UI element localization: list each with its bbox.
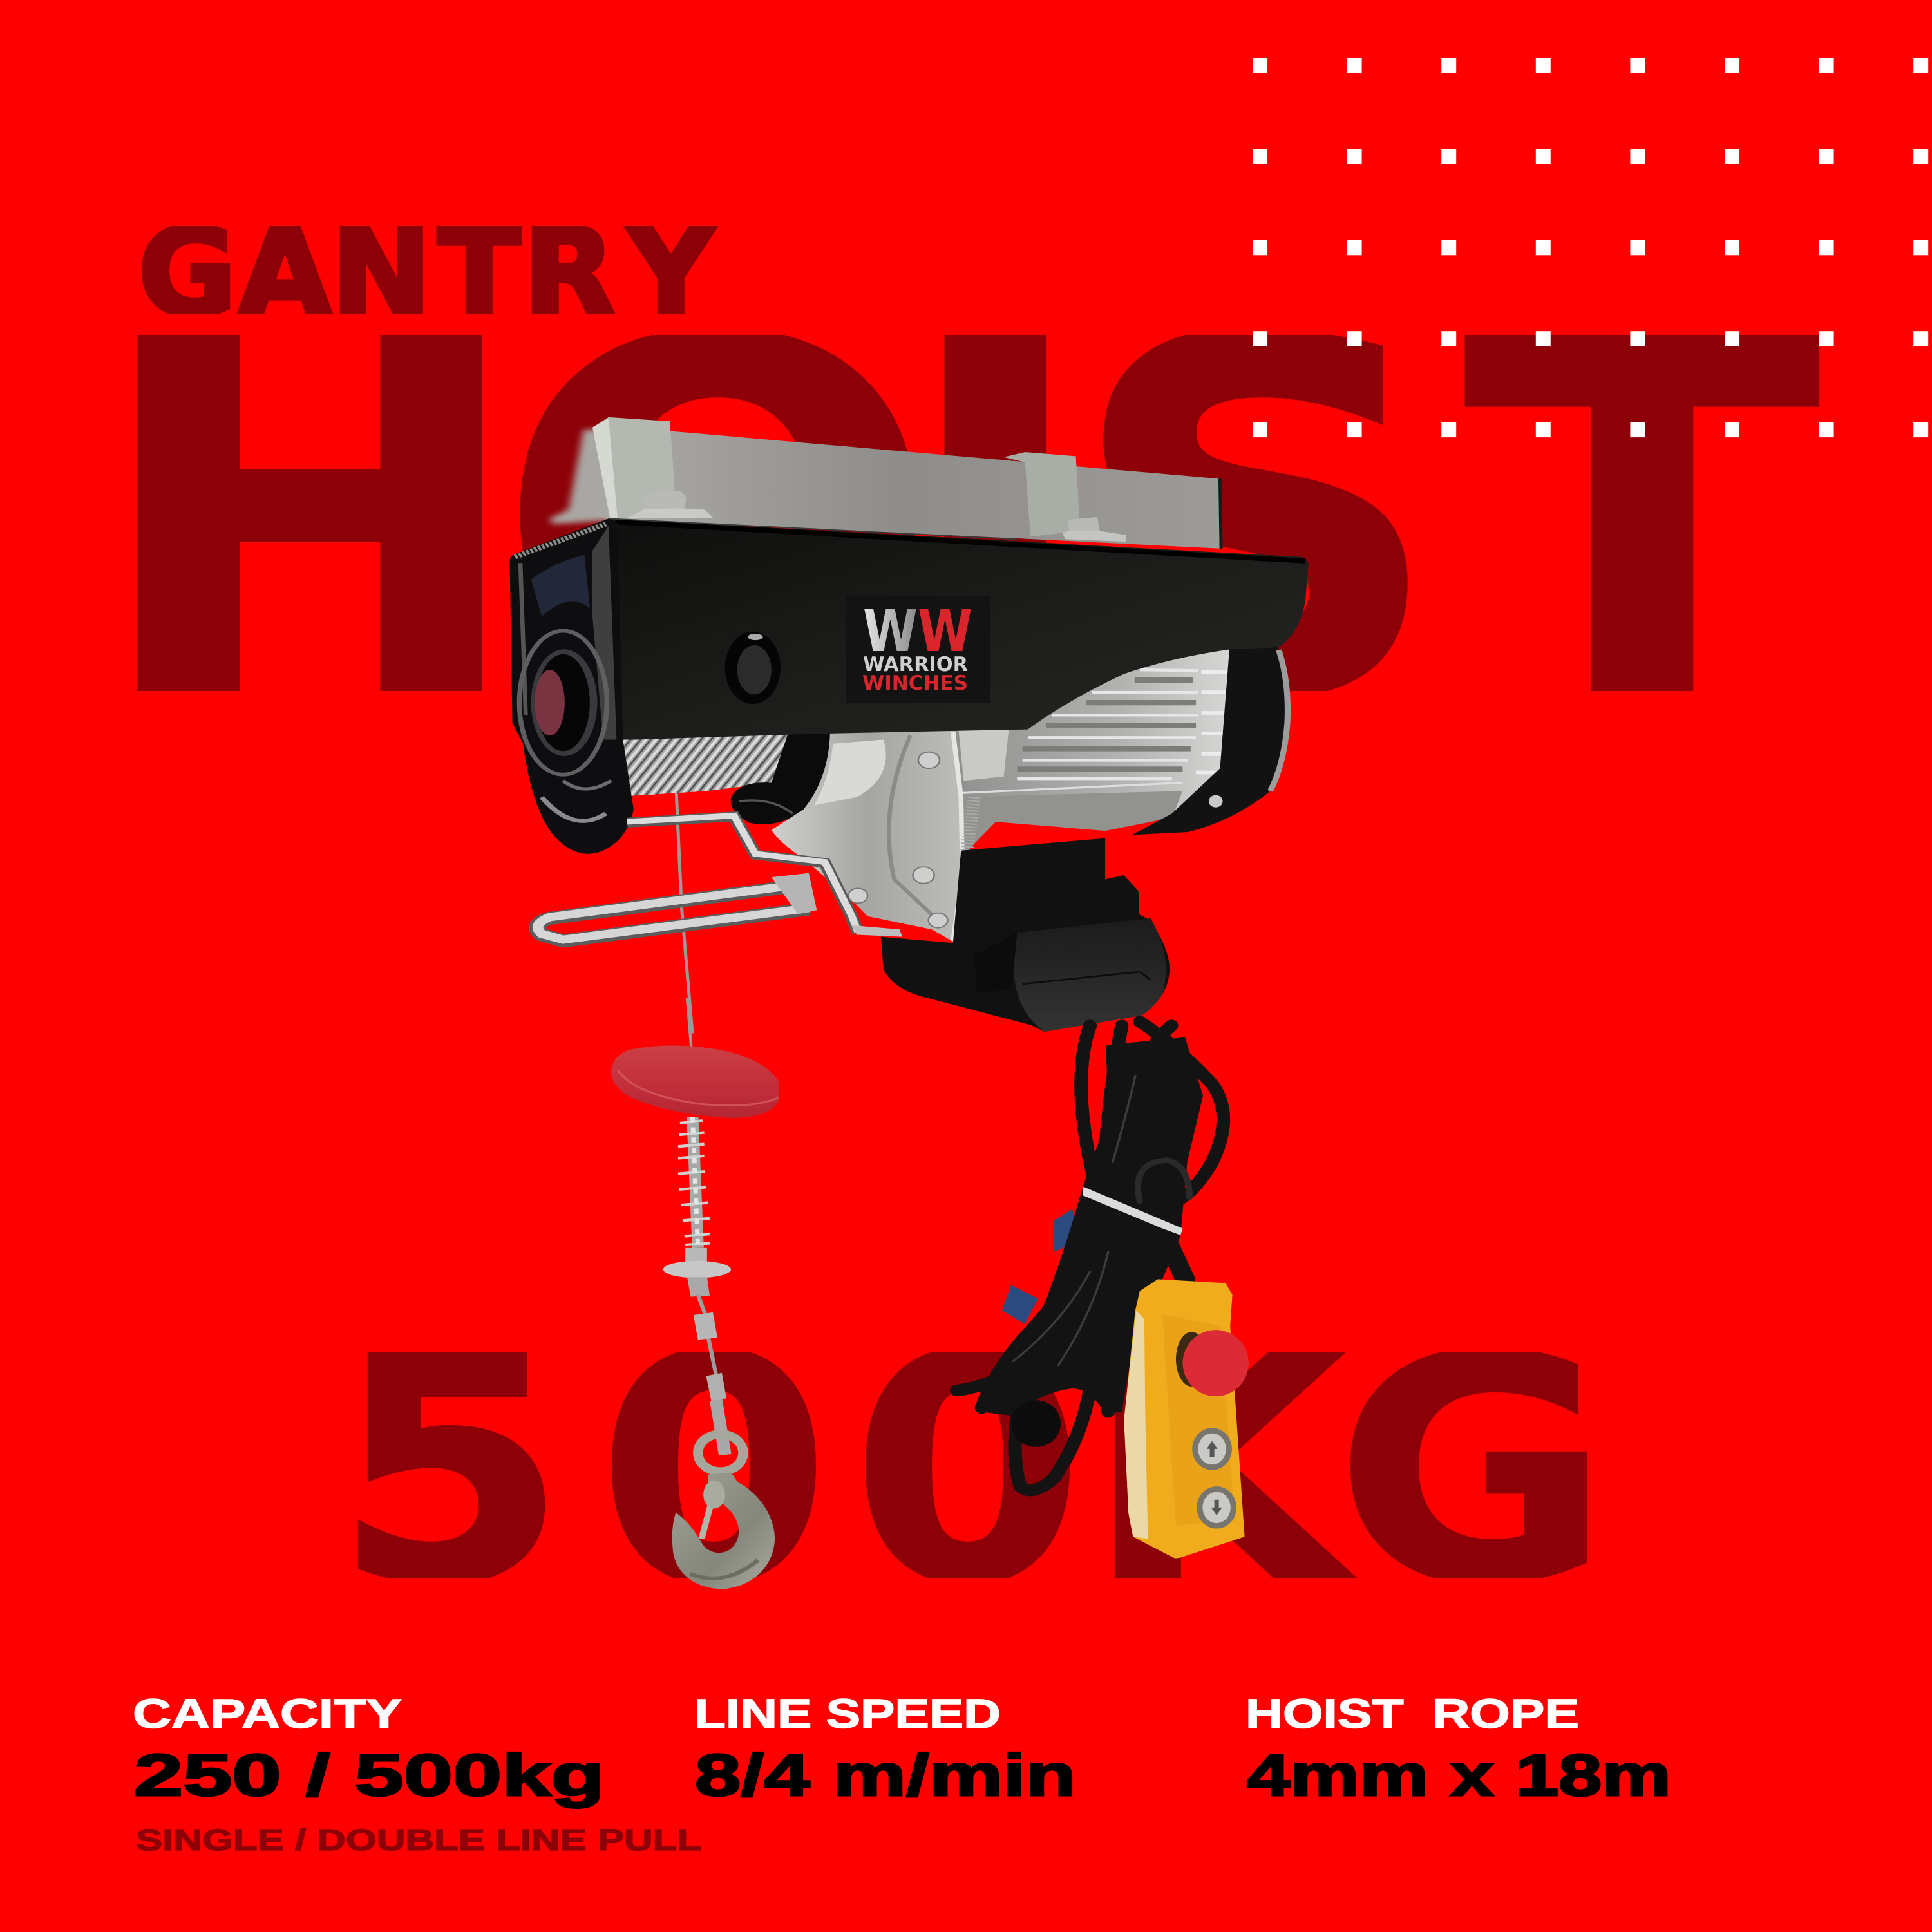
emergency stop button [1176,1330,1249,1396]
logo word WARRIOR: WARRIOR [863,653,968,676]
washer and collar [663,1248,731,1297]
product: rope, stopper and hook [611,998,779,1589]
hook [672,1472,775,1589]
capacity note: SINGLE / DOUBLE LINE PULL [136,1823,701,1857]
hoist rope label: HOIST ROPE [1245,1690,1579,1737]
control housing [881,838,1170,1032]
heading: GANTRY: GANTRY [138,203,716,343]
cable mass [981,1037,1203,1416]
motor end cap [1132,633,1288,835]
red stopper disc [611,1046,779,1118]
cable bundle [957,1021,1224,1490]
second flange [731,727,840,824]
gearbox [772,727,1009,943]
logo word WINCHES: WINCHES [862,672,968,695]
product: cable bundle and pendant [957,1021,1249,1559]
spec: capacity [133,1690,701,1857]
housing hole [725,632,781,704]
spring [678,1117,710,1248]
logo mark WW: WW [863,598,972,665]
line speed label: LINE SPEED [694,1690,1001,1737]
plug [1011,1400,1061,1447]
bracket left [592,417,713,520]
U handle [537,873,902,941]
mounting box [550,430,1221,549]
product: electric hoist upper body [509,417,1309,1034]
spec: line speed [694,1690,1076,1808]
wire rope [676,793,692,1034]
up button [1192,1428,1232,1470]
rope segment [687,998,691,1047]
capacity value: 250 / 500kg [134,1743,605,1808]
pendant controller [1124,1279,1249,1559]
heading: 500KG: 500KG [334,1291,1610,1652]
logo: Warrior Winches [846,596,990,703]
heading: HOIST: HOIST [91,238,1823,806]
lever rod [627,816,858,933]
cable and ferrules [694,1295,726,1455]
down button [1197,1486,1236,1529]
line speed value: 8/4 m/min [695,1743,1076,1808]
motor base plate [956,791,1182,855]
main black housing [609,518,1309,740]
spec: hoist rope [1245,1690,1671,1808]
cable tie [1083,1187,1183,1235]
hook eye [698,1434,743,1472]
rope drum [611,730,804,797]
dot grid [1253,58,1932,438]
capacity label: CAPACITY [133,1690,402,1737]
blue connectors [1002,1209,1081,1324]
bracket right [1004,452,1126,542]
left end cap wheel [509,518,634,854]
hoist rope value: 4mm x 18m [1247,1743,1671,1808]
motor fins [951,641,1236,822]
